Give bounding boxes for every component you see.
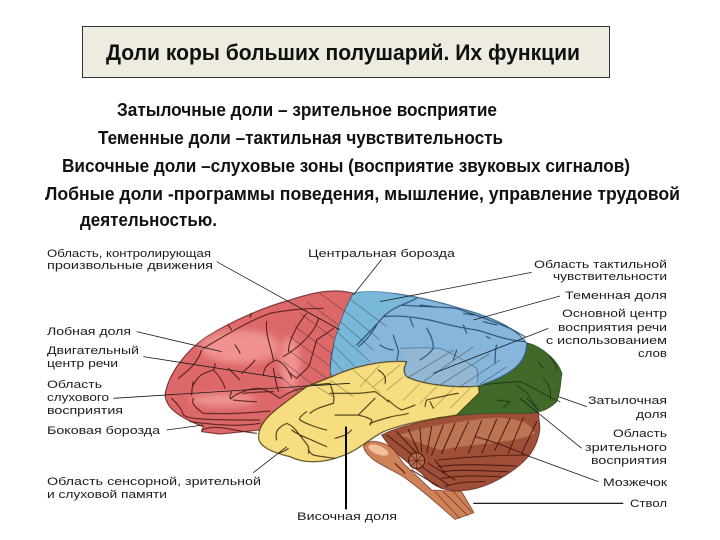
labels right: Область тактильной bbox=[534, 259, 667, 271]
title box bbox=[82, 26, 610, 78]
labels left: Двигательный bbox=[47, 345, 139, 357]
labels right: Область bbox=[613, 428, 667, 440]
labels center: Височная доля bbox=[297, 511, 397, 523]
labels left: Лобная доля bbox=[47, 326, 131, 338]
labels left: слухового bbox=[47, 392, 109, 404]
text block: functions of lobes bbox=[45, 99, 680, 230]
labels left: произвольные движения bbox=[47, 260, 213, 272]
labels right: Мозжечок bbox=[603, 477, 667, 489]
labels right bbox=[534, 259, 667, 510]
labels left: Боковая борозда bbox=[47, 425, 161, 437]
brain diagram bbox=[113, 259, 623, 519]
temporal lobe (yellow) bbox=[259, 361, 479, 462]
labels left: и слуховой памяти bbox=[47, 489, 167, 501]
labels right: доля bbox=[636, 409, 667, 421]
cerebellum bbox=[382, 412, 540, 491]
leader lines bbox=[113, 259, 623, 509]
text block: functions of lobes: Затылочные доли – зрительное восприятие bbox=[117, 99, 497, 120]
labels right: Теменная доля bbox=[565, 290, 667, 302]
labels left: Область сенсорной, зрительной bbox=[47, 476, 261, 488]
labels left: восприятия bbox=[47, 405, 123, 417]
labels right: восприятия речи bbox=[558, 322, 667, 334]
labels center bbox=[297, 248, 456, 523]
text block: functions of lobes: Теменные доли –тактильная чувствительность bbox=[98, 127, 503, 148]
labels right: Ствол bbox=[630, 498, 667, 510]
labels right: Основной центр bbox=[562, 308, 667, 320]
labels right: чувствительности bbox=[553, 271, 667, 283]
labels right: слов bbox=[638, 348, 667, 360]
labels right: с использованием bbox=[546, 335, 667, 347]
labels left: Область bbox=[47, 379, 102, 391]
labels right: восприятия bbox=[591, 455, 667, 467]
labels right: зрительного bbox=[585, 442, 667, 454]
text block: functions of lobes: Височные доли –слуховые зоны (восприятие звуковых сигналов) bbox=[62, 155, 630, 176]
labels left: Область, контролирующая bbox=[47, 248, 211, 260]
labels left: центр речи bbox=[47, 358, 118, 370]
labels right: Затылочная bbox=[588, 395, 667, 407]
text block: functions of lobes: Лобные доли -программы поведения, мышление, управление трудовой bbox=[45, 183, 680, 204]
brain stem bbox=[363, 441, 474, 519]
labels center: Центральная борозда bbox=[308, 248, 456, 260]
title: Доли коры больших полушарий. Их функции bbox=[106, 40, 580, 65]
occipital lobe (green) bbox=[457, 343, 562, 415]
text block: functions of lobes: деятельностью. bbox=[80, 209, 217, 230]
frontal lobe (red) bbox=[165, 291, 357, 434]
parietal lobe (blue) bbox=[330, 290, 527, 387]
labels left bbox=[47, 248, 261, 501]
